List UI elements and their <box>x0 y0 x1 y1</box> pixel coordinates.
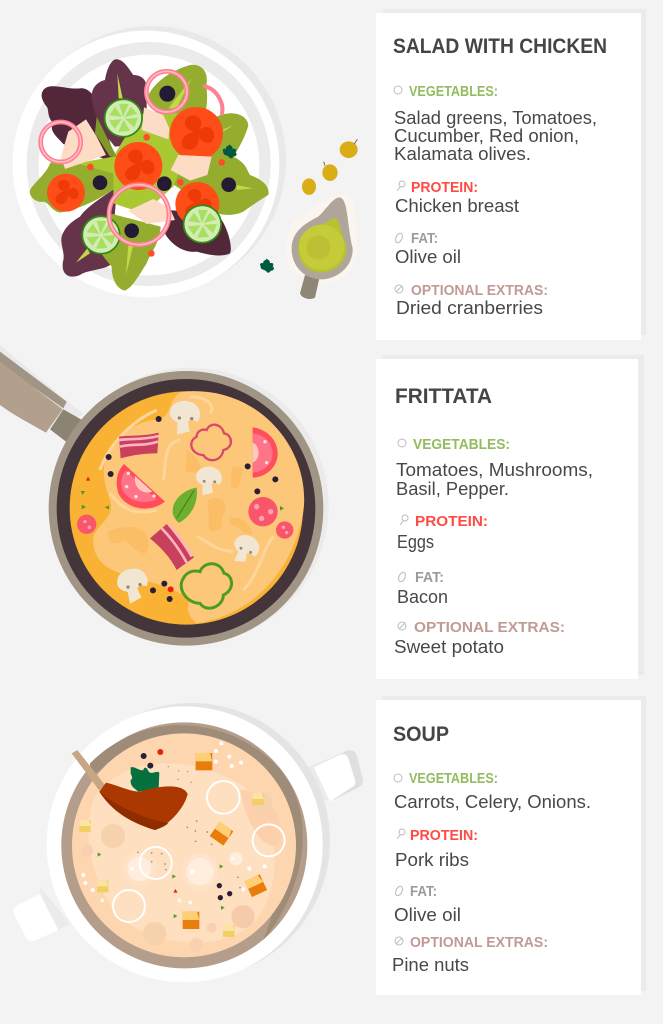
extras value: Sweet potato <box>394 636 504 657</box>
vegetables list: Carrots, Celery, Onions. <box>394 791 591 812</box>
vegetables list <box>394 107 597 164</box>
label: vegetables: VEGETABLES: <box>409 771 498 787</box>
pot handles <box>13 750 363 941</box>
icon: vegetables <box>394 774 402 782</box>
label: fat: FAT: <box>415 570 444 586</box>
icon: vegetables <box>398 439 406 447</box>
label: protein: PROTEIN: <box>410 828 478 844</box>
salami half slices <box>117 427 278 509</box>
kalamata olives <box>93 86 236 238</box>
salad leaves <box>30 59 269 291</box>
gravy boat with olive oil <box>286 193 357 299</box>
parsley <box>223 144 274 273</box>
vegetables list <box>396 459 593 499</box>
plate <box>13 26 286 297</box>
label: optional extras: OPTIONAL EXTRAS: <box>411 283 548 299</box>
tomatoes <box>47 107 223 226</box>
vegetables list: Kalamata olives. <box>394 143 531 164</box>
carrot cubes <box>183 753 267 929</box>
chicken pieces <box>61 107 212 224</box>
icon: extras <box>398 622 406 630</box>
herb flakes <box>81 477 284 511</box>
label: optional extras: OPTIONAL EXTRAS: <box>410 935 548 951</box>
heading: FRITTATA <box>395 385 492 408</box>
label: fat: FAT: <box>411 231 438 247</box>
vegetables list: Cucumber, Red onion, <box>394 125 579 146</box>
panel: salad with chicken <box>376 9 646 340</box>
protein value: Pork ribs <box>395 849 469 870</box>
icon: vegetables <box>394 86 402 94</box>
bacon <box>119 433 194 570</box>
celery cubes <box>79 793 264 937</box>
heading: SALAD WITH CHICKEN <box>393 35 607 58</box>
label: vegetables: VEGETABLES: <box>409 84 498 100</box>
pot body <box>47 703 330 982</box>
pan handle <box>0 345 85 446</box>
extras value: Dried cranberries <box>396 297 543 318</box>
vegetables list: Tomatoes, Mushrooms, <box>396 459 593 480</box>
peppercorns <box>141 749 232 900</box>
cucumbers <box>81 98 222 255</box>
pan body <box>49 368 329 646</box>
mushrooms <box>114 401 263 606</box>
fat value: Olive oil <box>395 246 461 267</box>
icon: extras <box>395 285 403 293</box>
vegetables list: Salad greens, Tomatoes, <box>394 107 597 128</box>
peppercorns <box>106 416 278 602</box>
label: protein: PROTEIN: <box>411 180 478 196</box>
icon: fat <box>394 885 404 897</box>
icon: protein <box>397 829 405 839</box>
illustration: soup pot <box>13 703 363 982</box>
cranberries <box>87 134 225 257</box>
label: vegetables: VEGETABLES: <box>413 437 510 453</box>
panel: soup <box>376 696 646 995</box>
pepper rings <box>181 425 232 608</box>
onion ring: behind <box>203 86 222 115</box>
icon: extras <box>395 937 403 945</box>
icon: fat <box>397 571 407 583</box>
fat value: Bacon <box>397 586 448 607</box>
icon: protein <box>397 181 405 191</box>
icon: fat <box>394 232 404 244</box>
heading: SOUP <box>393 723 449 746</box>
panel: frittata <box>376 355 644 679</box>
label: protein: PROTEIN: <box>415 514 488 530</box>
label: optional extras: OPTIONAL EXTRAS: <box>414 620 565 636</box>
basil leaf <box>173 488 197 523</box>
sausage slices <box>77 497 293 539</box>
herbs and fat drops <box>81 741 267 918</box>
fat value: Olive oil <box>394 904 461 925</box>
whole olives <box>302 139 358 195</box>
illustration: frittata pan <box>0 345 329 646</box>
omelette <box>70 391 304 625</box>
protein value: Eggs <box>397 531 434 552</box>
illustration: salad plate <box>13 26 358 299</box>
protein value: Chicken breast <box>395 195 519 216</box>
onion rings <box>113 781 285 922</box>
onion rings <box>41 71 187 245</box>
pork rib <box>72 750 188 830</box>
soup <box>72 733 296 957</box>
vegetables list: Basil, Pepper. <box>396 478 509 499</box>
label: fat: FAT: <box>410 884 437 900</box>
icon: protein <box>400 515 408 525</box>
extras value: Pine nuts <box>392 954 469 975</box>
